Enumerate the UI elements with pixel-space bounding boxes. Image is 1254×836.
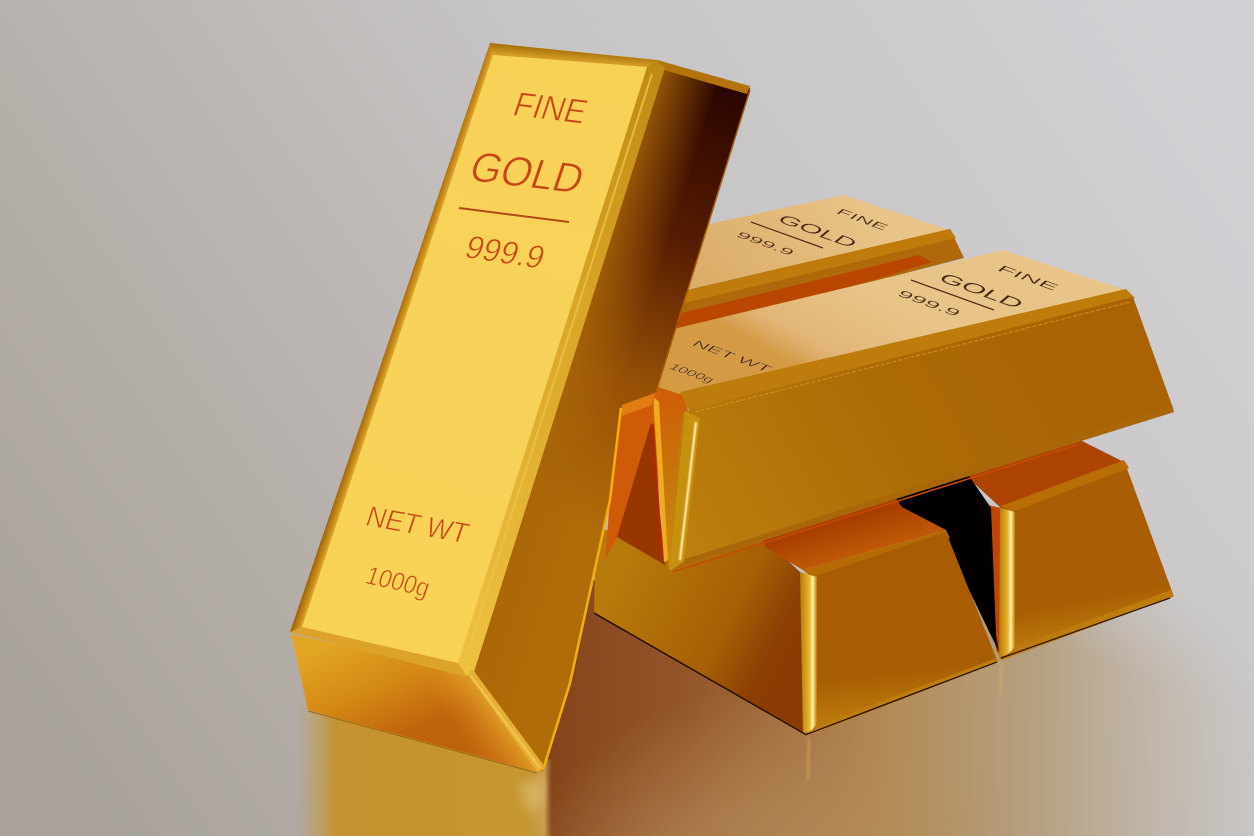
stamp: middle bar NET WT: NET WT [689, 338, 776, 374]
stamp: back bar GOLD: GOLD [773, 212, 862, 250]
side face [462, 60, 750, 772]
stamp: main bar 1000g: 1000g [362, 560, 434, 603]
bar: lower right [965, 438, 1173, 660]
bar: leaning front [290, 43, 750, 773]
bar: middle front [617, 250, 1174, 572]
bar: lower left [594, 490, 998, 736]
gap shadow between lower bars [880, 470, 999, 652]
bar: upper back [665, 195, 964, 345]
stamp: middle bar FINE: FINE [994, 263, 1062, 292]
stamp: main bar NET WT: NET WT [362, 501, 473, 550]
stamp: main bar 999.9: 999.9 [460, 230, 549, 276]
floor reflections [296, 580, 1254, 836]
stamp: middle bar 999.9: 999.9 [894, 288, 965, 318]
stamp: middle bar GOLD: GOLD [934, 271, 1028, 311]
main face [290, 43, 663, 676]
stamp: main bar GOLD: GOLD [464, 144, 590, 203]
stamp: back bar FINE: FINE [833, 207, 892, 232]
stamp: middle bar 1000g: 1000g [666, 362, 718, 385]
stamp: back bar 999.9: 999.9 [733, 230, 798, 257]
stamp: main bar FINE: FINE [508, 86, 592, 131]
end face [291, 634, 543, 772]
